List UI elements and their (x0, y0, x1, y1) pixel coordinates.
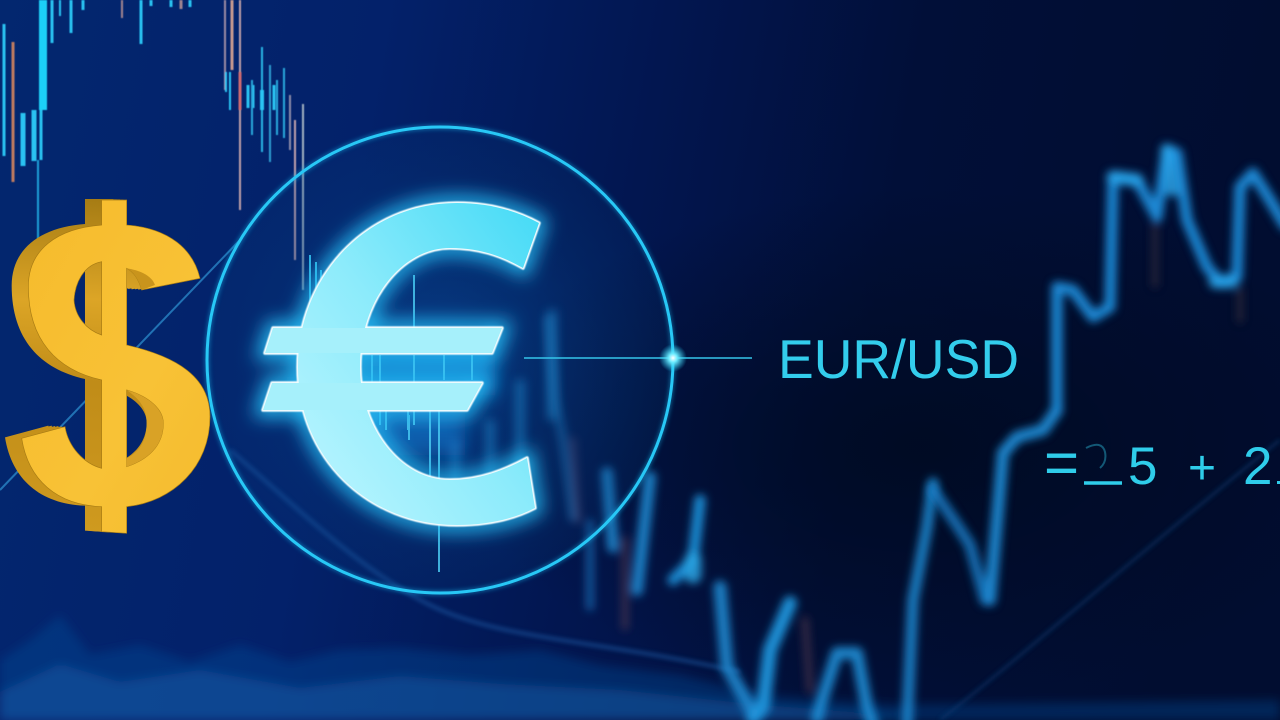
dollar face (22, 200, 210, 533)
blurred line chart: rising section (933, 150, 1280, 600)
euro glow (263, 203, 539, 525)
formula fragment: = (1044, 429, 1079, 496)
euro symbol (263, 203, 539, 525)
candlestick chart: top left sharp (4, 0, 303, 290)
dollar extrusion (5, 199, 207, 533)
blurred candles behind the euro (455, 310, 552, 500)
label: EUR/USD: EUR/USD (778, 328, 1019, 390)
glow inside the euro (365, 345, 495, 455)
formula fragment: 2 (1243, 437, 1272, 496)
dollar symbol (5, 199, 210, 533)
euro outline (263, 203, 539, 525)
formula fragment: + (1188, 442, 1216, 495)
euro bars (263, 328, 502, 410)
volume band at the bottom (0, 615, 1280, 720)
faint candle lines inside the circle (310, 255, 472, 572)
euro body (298, 203, 539, 525)
diagonal thin lines (0, 240, 1280, 720)
dollar lower bowl inner side (127, 390, 163, 467)
euro coin circle (207, 127, 673, 593)
formula fragment (1044, 429, 1280, 496)
connector line with glowing node (524, 344, 752, 372)
dollar upper terminal inner side (127, 268, 155, 290)
blurred line chart: falling section (548, 320, 933, 720)
formula fragment: 5 (1128, 437, 1157, 496)
